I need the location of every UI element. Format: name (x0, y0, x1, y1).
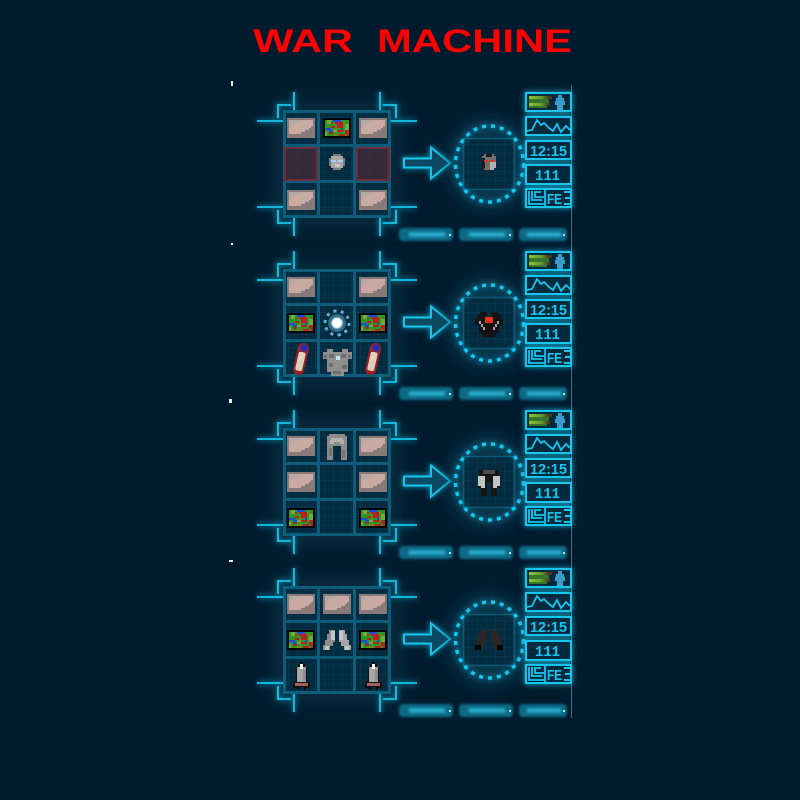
result target ring (447, 277, 531, 369)
icon: left rocket (293, 662, 310, 690)
icon: left circuit (287, 508, 315, 528)
icon: top-right plate (359, 436, 387, 456)
status bars (399, 228, 567, 241)
arrow (404, 306, 450, 338)
icon: middle-right plate (359, 472, 387, 492)
panel: recipe 4 boots (257, 568, 571, 717)
icon: top-left plate (287, 277, 315, 297)
panel: recipe 3 leggings (257, 410, 571, 559)
icon: top-right plate (359, 277, 387, 297)
status readouts (526, 411, 571, 526)
title (253, 23, 572, 59)
icon: right rocket (365, 662, 382, 690)
icon: left red slot (285, 148, 317, 180)
result target ring (447, 436, 531, 528)
icon: leggings ingredient (327, 434, 347, 460)
crafting grid frame (257, 251, 417, 395)
icon: top-left plate (287, 436, 315, 456)
status readouts (526, 93, 571, 208)
status bars (399, 546, 567, 559)
icon: top-middle plate (323, 594, 351, 614)
icon: helmet ingredient (329, 154, 345, 170)
status readouts (526, 252, 571, 367)
icon: right gauntlet (364, 342, 382, 376)
crafting grid frame (257, 92, 417, 236)
title: MACHINE (377, 23, 572, 59)
arrow (404, 148, 450, 178)
icon: left circuit (287, 313, 315, 333)
icon: boots ingredient (323, 630, 351, 650)
crafting grid frame (257, 568, 417, 712)
icon: right red slot (357, 148, 389, 180)
icon: right circuit (359, 630, 387, 650)
crafting grid frame (257, 410, 417, 554)
arrow (404, 624, 450, 654)
icon: top-left plate (287, 594, 315, 614)
divider line at right edge (571, 85, 572, 718)
icon: top-right plate (359, 594, 387, 614)
icon: circuit board (323, 118, 351, 138)
icon: chestplate (323, 349, 352, 376)
status readouts (526, 569, 571, 684)
panel: recipe 2 chestplate (257, 251, 571, 400)
status bars (399, 704, 567, 717)
icon: war machine helmet (482, 154, 496, 170)
result target ring (447, 118, 531, 210)
icon: war machine leggings (478, 470, 500, 496)
icon: middle-left plate (287, 472, 315, 492)
icon: war machine chestplate (475, 312, 503, 337)
icon: bottom-left plate (287, 190, 315, 210)
icon: left gauntlet (292, 342, 310, 376)
arrow (404, 466, 450, 496)
icon: right circuit (359, 508, 387, 528)
icon: top-right plate (359, 118, 387, 138)
icon: war machine boots (475, 630, 503, 650)
result target ring (447, 594, 531, 686)
icon: energy core (325, 311, 349, 335)
white speck marks (229, 81, 233, 562)
title: WAR (253, 23, 353, 59)
icon: right circuit (359, 313, 387, 333)
status bars (399, 387, 567, 400)
icon: bottom-right plate (359, 190, 387, 210)
panel: recipe 1 helmet (257, 92, 571, 241)
icon: left circuit (287, 630, 315, 650)
icon: top-left plate (287, 118, 315, 138)
